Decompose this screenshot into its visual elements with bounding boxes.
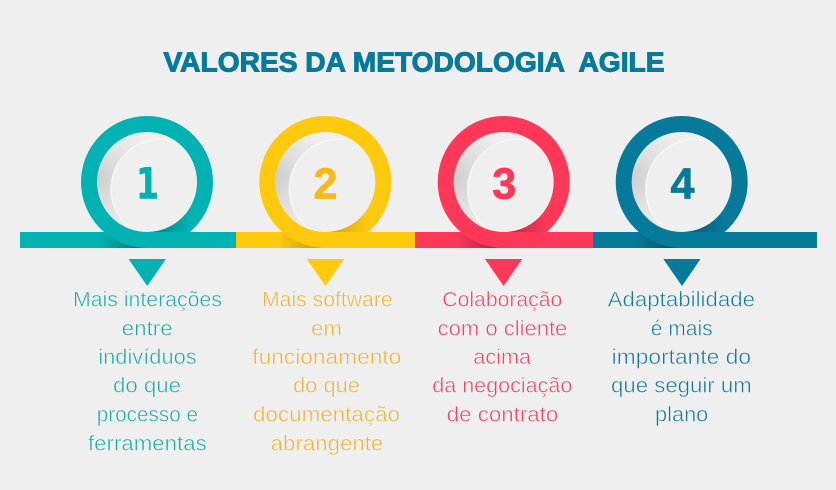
inner disc 2: [276, 141, 307, 218]
text block 2: em: [311, 316, 342, 340]
timeline segment 4: [593, 232, 817, 248]
text block 4: que seguir um: [611, 374, 752, 398]
pointer 3: [485, 259, 522, 286]
text block 1: Mais interações: [73, 288, 222, 312]
text block 1: processo e: [97, 403, 198, 427]
text block 1: indivíduos: [98, 345, 197, 369]
panel: value 1: [20, 124, 236, 456]
number 4: 4: [670, 160, 695, 208]
segment shadow 2: [278, 232, 325, 248]
ring shadow 1: [148, 218, 182, 232]
number 3: 3: [492, 160, 516, 208]
text block 1: do que: [113, 374, 181, 398]
pointer 1: [128, 259, 166, 286]
ring shadow 2: [327, 218, 360, 232]
text block 4: [608, 288, 755, 427]
panel: value 4: [593, 124, 817, 427]
ring 4: [624, 124, 740, 240]
text block 2: do que: [293, 374, 360, 398]
panel: value 2: [236, 124, 415, 456]
text block 1: entre: [122, 316, 173, 340]
timeline segment 3: [415, 232, 593, 248]
ring 1: [89, 124, 205, 240]
text block 3: da negociação: [432, 374, 572, 398]
ring 2: [267, 124, 383, 240]
timeline segment 2: [236, 232, 415, 248]
pointer 4: [663, 259, 700, 286]
ring 3: [446, 124, 562, 240]
title: VALORES DA METODOLOGIA AGILE: [164, 46, 664, 78]
text block 4: importante do: [612, 345, 751, 369]
ring shadow 3: [507, 216, 541, 232]
text block 2: [252, 288, 401, 456]
ring shadow 4: [683, 219, 716, 232]
segment shadow 3: [457, 232, 504, 248]
segment shadow 1: [100, 232, 147, 248]
inner disc 3: [454, 141, 486, 218]
text block 2: Mais software: [262, 288, 393, 312]
number 2: 2: [314, 160, 338, 208]
text block 3: acima: [473, 345, 531, 369]
text block 4: Adaptabilidade: [608, 288, 755, 312]
segment shadow 4: [635, 232, 682, 248]
number 1: 1: [136, 160, 159, 210]
inner disc 4: [632, 141, 664, 218]
text block 2: documentação: [253, 403, 400, 427]
timeline segment 1: [20, 232, 236, 248]
inner disc 1: [97, 141, 128, 218]
text block 1: [73, 288, 222, 456]
text block 2: abrangente: [271, 432, 383, 456]
text block 3: com o cliente: [438, 316, 567, 340]
panel: value 3: [415, 124, 593, 427]
text block 4: plano: [655, 403, 708, 427]
text block 3: Colaboração: [442, 288, 562, 312]
text block 2: funcionamento: [252, 345, 401, 369]
text block 3: de contrato: [447, 403, 558, 427]
text block 1: ferramentas: [88, 432, 207, 456]
text block 4: é mais: [651, 316, 713, 340]
pointer 2: [307, 259, 344, 286]
text block 3: [432, 288, 572, 427]
